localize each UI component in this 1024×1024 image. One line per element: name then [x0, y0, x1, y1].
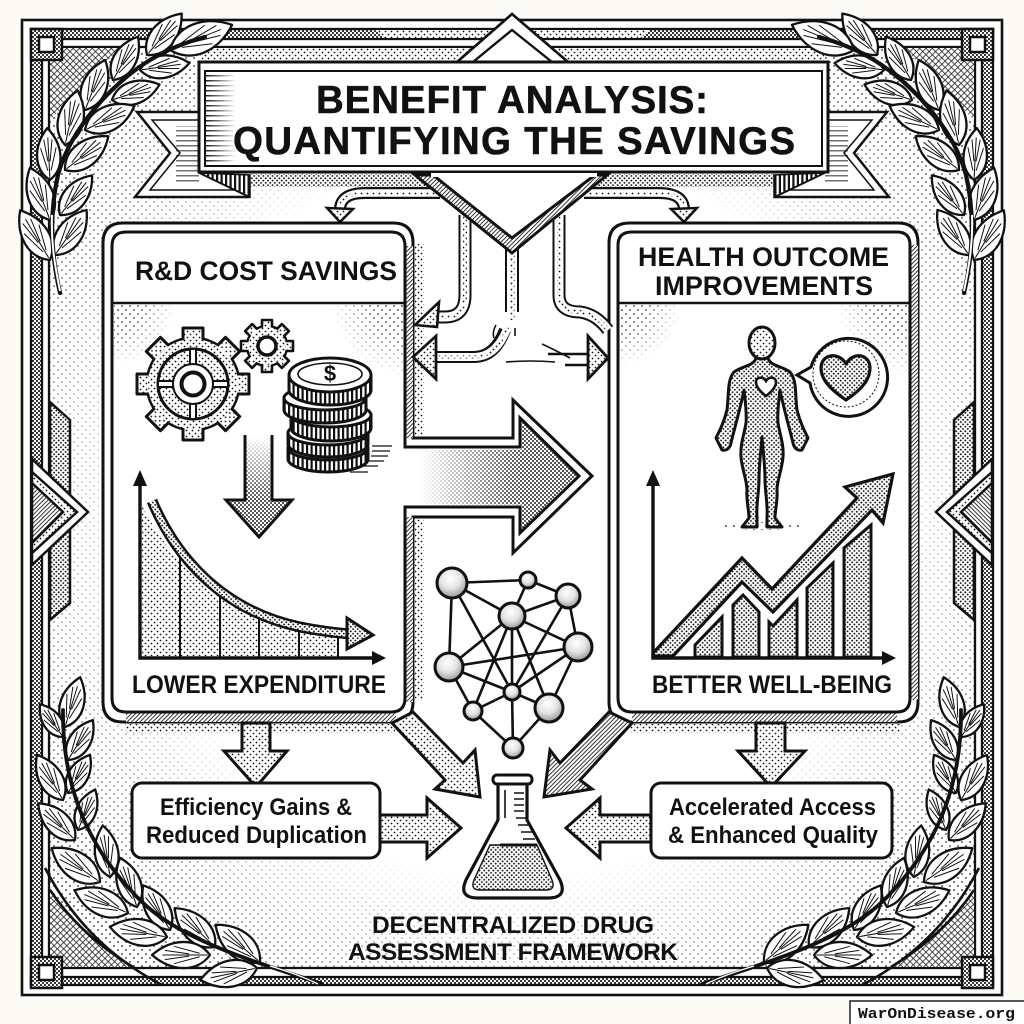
title text — [233, 79, 795, 163]
arrow: left panel down to efficiency box — [224, 723, 287, 787]
callout box: efficiency gains — [132, 783, 380, 858]
panel heading: IMPROVEMENTS — [655, 271, 873, 301]
frame: corner hatching top right — [904, 48, 974, 120]
panel outer outline — [609, 223, 918, 722]
shadow dots beside left panel — [125, 244, 424, 733]
arrow: access to flask — [566, 798, 651, 858]
frame: side chevron left — [32, 402, 88, 620]
icon: large gear — [137, 328, 249, 440]
frame: top band dots — [200, 48, 824, 61]
arrow: down cost arrow — [226, 435, 292, 537]
panel: health outcome improvements — [609, 223, 918, 722]
frame: corner arc bottom right — [862, 868, 979, 985]
callout box: accelerated access: & Enhanced Quality — [668, 822, 879, 849]
icon: human figure — [716, 327, 808, 530]
frame: corner square top left — [31, 29, 62, 60]
arrow: efficiency to flask — [380, 798, 461, 858]
callout box: efficiency gains: Efficiency Gains & — [160, 794, 352, 821]
panel outer outline with big arrow — [103, 223, 592, 722]
footer caption: ASSESSMENT FRAMEWORK — [348, 939, 678, 966]
network edges — [449, 580, 578, 748]
frame: light band section — [375, 30, 650, 38]
banner frame — [199, 62, 828, 172]
arrow: left panel diagonal to flask — [392, 712, 480, 797]
frame: corner hatching top left — [50, 48, 120, 120]
panel heading: HEALTH OUTCOME — [638, 242, 889, 272]
flow arrow to left panel — [415, 215, 465, 327]
panel heading: R&D COST SAVINGS — [135, 256, 397, 286]
laurel bottom right — [702, 674, 997, 993]
title banner — [199, 62, 828, 172]
footer caption — [348, 912, 678, 966]
frame: corner arc bottom left — [45, 868, 162, 985]
arrow: right panel diagonal to flask — [544, 712, 632, 797]
panel heading — [638, 242, 889, 301]
icon: small gear — [241, 320, 293, 372]
chart caption: BETTER WELL-BEING — [652, 671, 892, 699]
banner shading lines — [206, 73, 236, 165]
panel: R&D cost savings — [103, 223, 592, 722]
panel corner halftone — [114, 305, 404, 380]
watermark: WarOnDisease.org — [858, 1006, 1015, 1023]
network nodes — [435, 568, 592, 758]
laurel top left — [9, 6, 238, 293]
chart caption: LOWER EXPENDITURE — [132, 671, 386, 699]
laurel top right — [786, 6, 1015, 293]
dotted band under title — [250, 174, 775, 187]
banner inner frame — [205, 71, 822, 166]
frame: corner square top right — [962, 29, 993, 60]
panel header rule — [618, 302, 910, 304]
title text: QUANTIFYING THE SAVINGS — [233, 120, 795, 163]
frame: top triangle — [457, 14, 568, 62]
laurel bottom left — [27, 674, 322, 993]
frame: side chevron right — [936, 402, 992, 620]
panel inner outline — [618, 232, 910, 712]
icon: coin stack — [284, 358, 392, 472]
callout box: accelerated access: Accelerated Access — [669, 794, 876, 821]
panel hatched edge — [632, 245, 918, 722]
chart: declining expenditure — [133, 470, 386, 665]
icon: flask — [464, 775, 562, 898]
connector arrow top right — [584, 193, 697, 222]
frame: corner square bottom left — [31, 957, 62, 988]
chart: rising health outcomes — [646, 470, 896, 665]
banner chevron pointer — [415, 175, 607, 253]
dollar sign: $ — [324, 361, 336, 386]
central split double arrow — [413, 245, 608, 379]
arrow: right panel down to access box — [738, 723, 805, 787]
title text: BENEFIT ANALYSIS: — [316, 79, 708, 122]
icon: heart speech bubble — [797, 338, 888, 416]
connector arrow top left — [327, 193, 440, 222]
callout box: efficiency gains: Reduced Duplication — [146, 822, 367, 849]
footer caption: DECENTRALIZED DRUG — [372, 912, 654, 939]
callout box: accelerated access — [651, 783, 892, 858]
panel corner halftone — [619, 305, 909, 380]
watermark — [850, 1001, 1024, 1024]
frame: corner square bottom right — [962, 957, 993, 988]
network graph — [435, 568, 592, 758]
ribbon left — [135, 112, 250, 197]
panel hatched edge — [126, 246, 413, 722]
panel inner outline — [112, 232, 579, 712]
big arrow halftone — [410, 422, 577, 530]
panel header rule — [112, 302, 405, 304]
shadow dots below right panel — [630, 724, 900, 733]
flow arrow to right panel — [559, 215, 608, 330]
ribbon right — [774, 112, 889, 197]
